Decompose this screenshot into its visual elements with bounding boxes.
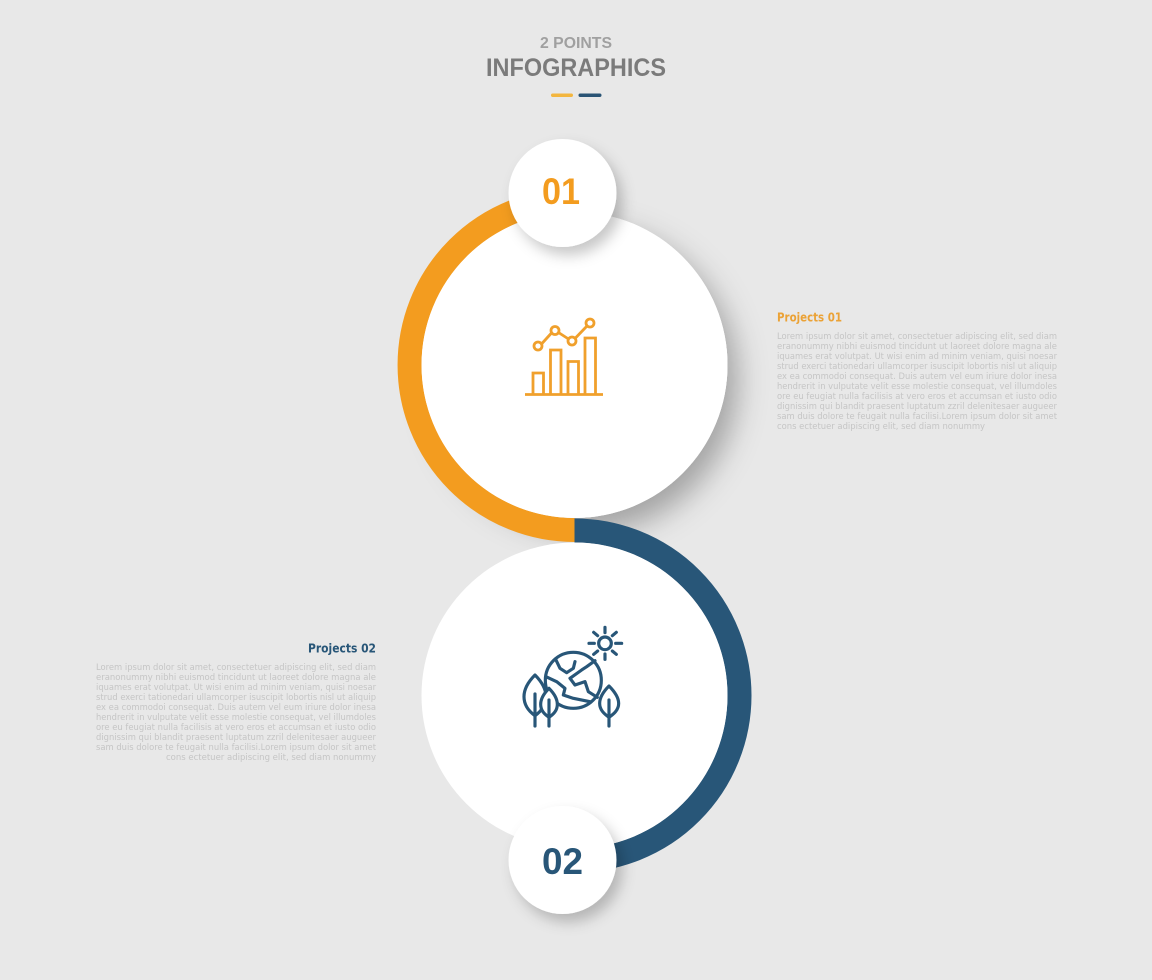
orange ring arc [410, 200, 574, 530]
subtitle: 2 points: 2 POINTS [540, 35, 612, 52]
body copy 02: strud exerci tationedari ullamcorper isuscipit lobortis nisl ut aliquip [96, 693, 376, 703]
body copy 02: sam duis dolore te feugait nulla facilisi.Lorem ipsum dolor sit amet [96, 743, 377, 753]
icon: bar chart with trend line [525, 319, 603, 394]
title accent dashes [551, 94, 602, 97]
trees [524, 675, 619, 726]
heading: projects 01: Projects 01 [777, 310, 842, 324]
heading: projects 02: Projects 02 [308, 640, 376, 656]
body copy 01: eranonummy nibhi euismod tincidunt ut laoreet dolore magna ale [777, 342, 1057, 352]
body copy 01: hendrerit in vulputate velit esse molestie consequat, vel illumdoles [777, 382, 1057, 392]
body copy 01: cons ectetuer adipiscing elit, sed diam nonummy [777, 422, 985, 432]
body copy 01: Lorem ipsum dolor sit amet, consectetuer adipiscing elit, sed diam [777, 332, 1057, 342]
body copy 01: dignissim qui blandit praesent luptatum zzril delenitesaer augueer [777, 402, 1057, 412]
blue ring arc [574, 530, 740, 860]
body copy 02: cons ectetuer adipiscing elit, sed diam nonummy [166, 753, 376, 763]
text block: projects 01 [777, 310, 1058, 432]
heading: infographics: INFOGRAPHICS [486, 54, 666, 82]
body copy 02: eranonummy nibhi euismod tincidunt ut laoreet dolore magna ale [96, 673, 376, 683]
panel: circle 1 [422, 212, 728, 518]
badge 01: 01 [542, 171, 580, 212]
icon: globe, sun and trees [524, 627, 622, 726]
panel: circle 2 [422, 542, 728, 848]
badge 02 [508, 806, 616, 914]
body copy 01: iquames erat volutpat. Ut wisi enim ad minim veniam, quisi noesar [777, 352, 1057, 362]
badge 01 [508, 139, 616, 247]
body copy 02: iquames erat volutpat. Ut wisi enim ad minim veniam, quisi noesar [96, 683, 376, 693]
title [486, 35, 666, 97]
body copy 01: sam duis dolore te feugait nulla facilisi.Lorem ipsum dolor sit amet [777, 412, 1058, 422]
globe [545, 652, 601, 708]
circle 1 shadow [422, 212, 728, 518]
body copy 02: dignissim qui blandit praesent luptatum zzril delenitesaer augueer [96, 733, 376, 743]
text block: projects 02 [96, 640, 377, 763]
body copy 02: ex ea commodoi consequat. Duis autem vel eum iriure dolor inesa [96, 703, 376, 713]
body copy 01: ore eu feugiat nulla facilisis at vero eros et accumsan et iusto odio [777, 392, 1057, 402]
body copy 01 [777, 332, 1058, 432]
badge 02: 02 [542, 841, 583, 882]
body copy 02: ore eu feugiat nulla facilisis at vero eros et accumsan et iusto odio [96, 723, 376, 733]
body copy 01: ex ea commodoi consequat. Duis autem vel eum iriure dolor inesa [777, 372, 1057, 382]
body copy 02 [96, 663, 377, 763]
body copy 02: Lorem ipsum dolor sit amet, consectetuer adipiscing elit, sed diam [96, 663, 376, 673]
body copy 01: strud exerci tationedari ullamcorper isuscipit lobortis nisl ut aliquip [777, 362, 1057, 372]
sun [589, 627, 622, 659]
body copy 02: hendrerit in vulputate velit esse molestie consequat, vel illumdoles [96, 713, 376, 723]
